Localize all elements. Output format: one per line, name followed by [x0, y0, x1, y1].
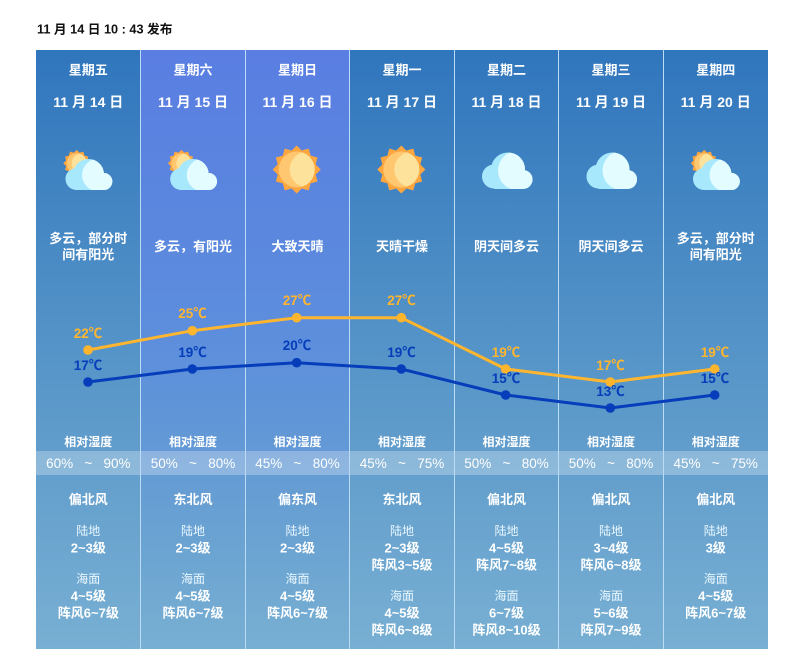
chart: daily low temperature line: 17℃: [74, 358, 103, 373]
wind: Tuesday: 海面: [494, 588, 519, 603]
column: Thursday header: 多云，部分时: [677, 231, 755, 246]
wind: Monday: [371, 492, 433, 638]
relative humidity row: 50% ~ 80%: [569, 456, 653, 471]
wind: Friday: 4~5级: [71, 588, 106, 604]
wind: Friday: 海面: [76, 571, 100, 586]
wind: Saturday: 2~3级: [175, 540, 211, 556]
wind: Wednesday: 阵风7~9级: [580, 622, 642, 638]
wind: Monday: 陆地: [390, 523, 414, 538]
wind: Tuesday: 6~7级: [489, 606, 524, 620]
relative humidity row: 45% ~ 75%: [673, 456, 758, 471]
relative humidity row: 45% ~ 75%: [360, 456, 444, 471]
column: Monday header: [367, 62, 437, 254]
wind: Tuesday: [472, 492, 541, 638]
wind: Thursday: [685, 492, 746, 620]
column: Tuesday header: 11 月 18 日: [471, 94, 542, 110]
wind: Tuesday: 阵风8~10级: [472, 622, 541, 638]
column: Friday header: 星期五: [69, 62, 108, 78]
wind: Saturday: 4~5级: [175, 588, 211, 604]
wind: Sunday: 2~3级: [280, 540, 315, 556]
wind: Wednesday: 3~4级: [593, 540, 629, 556]
chart: daily low temperature line: 19℃: [178, 345, 207, 360]
column dividers: [140, 50, 664, 649]
column: Wednesday header: [576, 62, 646, 254]
wind: Wednesday: [580, 492, 642, 638]
column: Thursday header: 星期四: [696, 62, 735, 78]
column: Thursday header: 11 月 20 日: [681, 94, 751, 110]
column: Monday header: 11 月 17 日: [367, 94, 437, 110]
chart: daily high temperature line: [74, 293, 730, 387]
column: Monday header: 星期一: [382, 62, 422, 78]
wind: Sunday: [267, 492, 328, 620]
column: Tuesday header: 阴天间多云: [474, 239, 539, 254]
chart: daily high temperature line: 17℃: [596, 358, 625, 373]
wind: Friday: [58, 492, 119, 620]
column: Sunday header: 11 月 16 日: [262, 94, 333, 110]
wind: Sunday: 偏东风: [278, 492, 317, 507]
wind: Saturday: 东北风: [173, 492, 213, 507]
chart: daily low temperature line: 20℃: [283, 338, 312, 353]
wind: Friday: 陆地: [76, 523, 100, 538]
column: Wednesday header: 星期三: [591, 62, 631, 78]
column: Saturday header: [154, 62, 232, 254]
wind: Wednesday: 偏北风: [591, 492, 631, 507]
humidity band: [36, 451, 768, 475]
wind: Tuesday: 偏北风: [487, 492, 526, 507]
wind: Saturday: 海面: [181, 571, 205, 586]
chart: daily low temperature line: 19℃: [387, 345, 416, 360]
wind: Thursday: 偏北风: [696, 492, 735, 507]
relative humidity row: 相对湿度: [378, 434, 426, 449]
column: Friday header: 多云，部分时: [49, 231, 127, 246]
wind: Thursday: 海面: [704, 571, 728, 586]
relative humidity row: 相对湿度: [692, 434, 740, 449]
relative humidity row: 60% ~ 90%: [46, 456, 131, 471]
chart: daily low temperature line: 15℃: [492, 371, 521, 386]
wind: Monday: 阵风6~8级: [371, 622, 433, 638]
wind: Saturday: 陆地: [181, 523, 205, 538]
relative humidity row: [46, 434, 758, 471]
column: Thursday header: [677, 62, 755, 262]
publish time heading: 11 月 14 日 10 : 43 发布: [37, 22, 173, 36]
chart: daily high temperature line: 19℃: [492, 345, 521, 360]
chart: daily high temperature line: 27℃: [283, 293, 312, 308]
wind: Wednesday: 陆地: [599, 523, 623, 538]
column: Monday header: 天晴干燥: [376, 239, 428, 254]
chart: daily high temperature line: 22℃: [74, 326, 103, 341]
column: Tuesday header: [471, 62, 542, 254]
wind: Tuesday: 阵风7~8级: [476, 558, 537, 572]
relative humidity row: 45% ~ 80%: [255, 456, 340, 471]
relative humidity row: 相对湿度: [587, 434, 635, 449]
column: Friday header: [49, 62, 127, 262]
wind: Thursday: 陆地: [704, 523, 728, 538]
wind: Monday: 东北风: [382, 492, 422, 507]
column: Saturday header: 多云，有阳光: [154, 239, 232, 254]
wind: Wednesday: 阵风6~8级: [580, 558, 642, 572]
wind: Thursday: 阵风6~7级: [685, 606, 746, 620]
column: Friday header: 11 月 14 日: [53, 94, 123, 110]
wind: Friday: 阵风6~7级: [58, 606, 119, 620]
wind: Thursday: 4~5级: [698, 588, 733, 604]
column: Wednesday header: 11 月 19 日: [576, 94, 646, 110]
chart: daily low temperature line: [74, 338, 730, 413]
panel: weekend highlight columns: [141, 50, 350, 649]
wind: Wednesday: 5~6级: [593, 606, 629, 620]
column: Sunday header: 大致天晴: [271, 239, 324, 254]
wind: Monday: 2~3级: [384, 540, 420, 556]
wind: Friday: 2~3级: [71, 540, 106, 556]
wind: Saturday: [162, 492, 224, 620]
wind: Monday: 阵风3~5级: [371, 558, 433, 572]
column: Tuesday header: 星期二: [487, 62, 526, 78]
chart: daily high temperature line: 27℃: [387, 293, 416, 308]
wind: Sunday: 阵风6~7级: [267, 606, 328, 620]
chart: daily low temperature line: 15℃: [701, 371, 730, 386]
chart: daily low temperature line: 13℃: [596, 384, 625, 399]
wind: Monday: 海面: [390, 588, 414, 603]
relative humidity row: 相对湿度: [273, 434, 322, 449]
column: Saturday header: 星期六: [173, 62, 213, 78]
column: Thursday header: 间有阳光: [690, 247, 742, 262]
relative humidity row: 相对湿度: [482, 434, 531, 449]
wind: Wednesday: 海面: [599, 588, 623, 603]
wind: Monday: 4~5级: [384, 606, 420, 620]
column: Sunday header: [262, 62, 333, 254]
wind: Saturday: 阵风6~7级: [162, 606, 224, 620]
wind: Tuesday: 4~5级: [489, 540, 524, 556]
column: Friday header: 间有阳光: [62, 247, 114, 262]
relative humidity row: 50% ~ 80%: [151, 456, 235, 471]
wind: Tuesday: 陆地: [494, 523, 519, 538]
relative humidity row: 相对湿度: [64, 434, 112, 449]
wind: Sunday: 陆地: [285, 523, 310, 538]
chart: daily high temperature line: 19℃: [701, 345, 730, 360]
chart: daily high temperature line: 25℃: [178, 306, 207, 321]
relative humidity row: 相对湿度: [169, 434, 217, 449]
column: Wednesday header: 阴天间多云: [578, 239, 644, 254]
wind: Sunday: 海面: [285, 571, 310, 586]
column: Sunday header: 星期日: [278, 62, 317, 78]
wind: Sunday: 4~5级: [280, 588, 315, 604]
column: Saturday header: 11 月 15 日: [158, 94, 228, 110]
wind: Friday: 偏北风: [69, 492, 108, 507]
relative humidity row: 50% ~ 80%: [464, 456, 549, 471]
wind: Thursday: 3级: [706, 540, 726, 556]
